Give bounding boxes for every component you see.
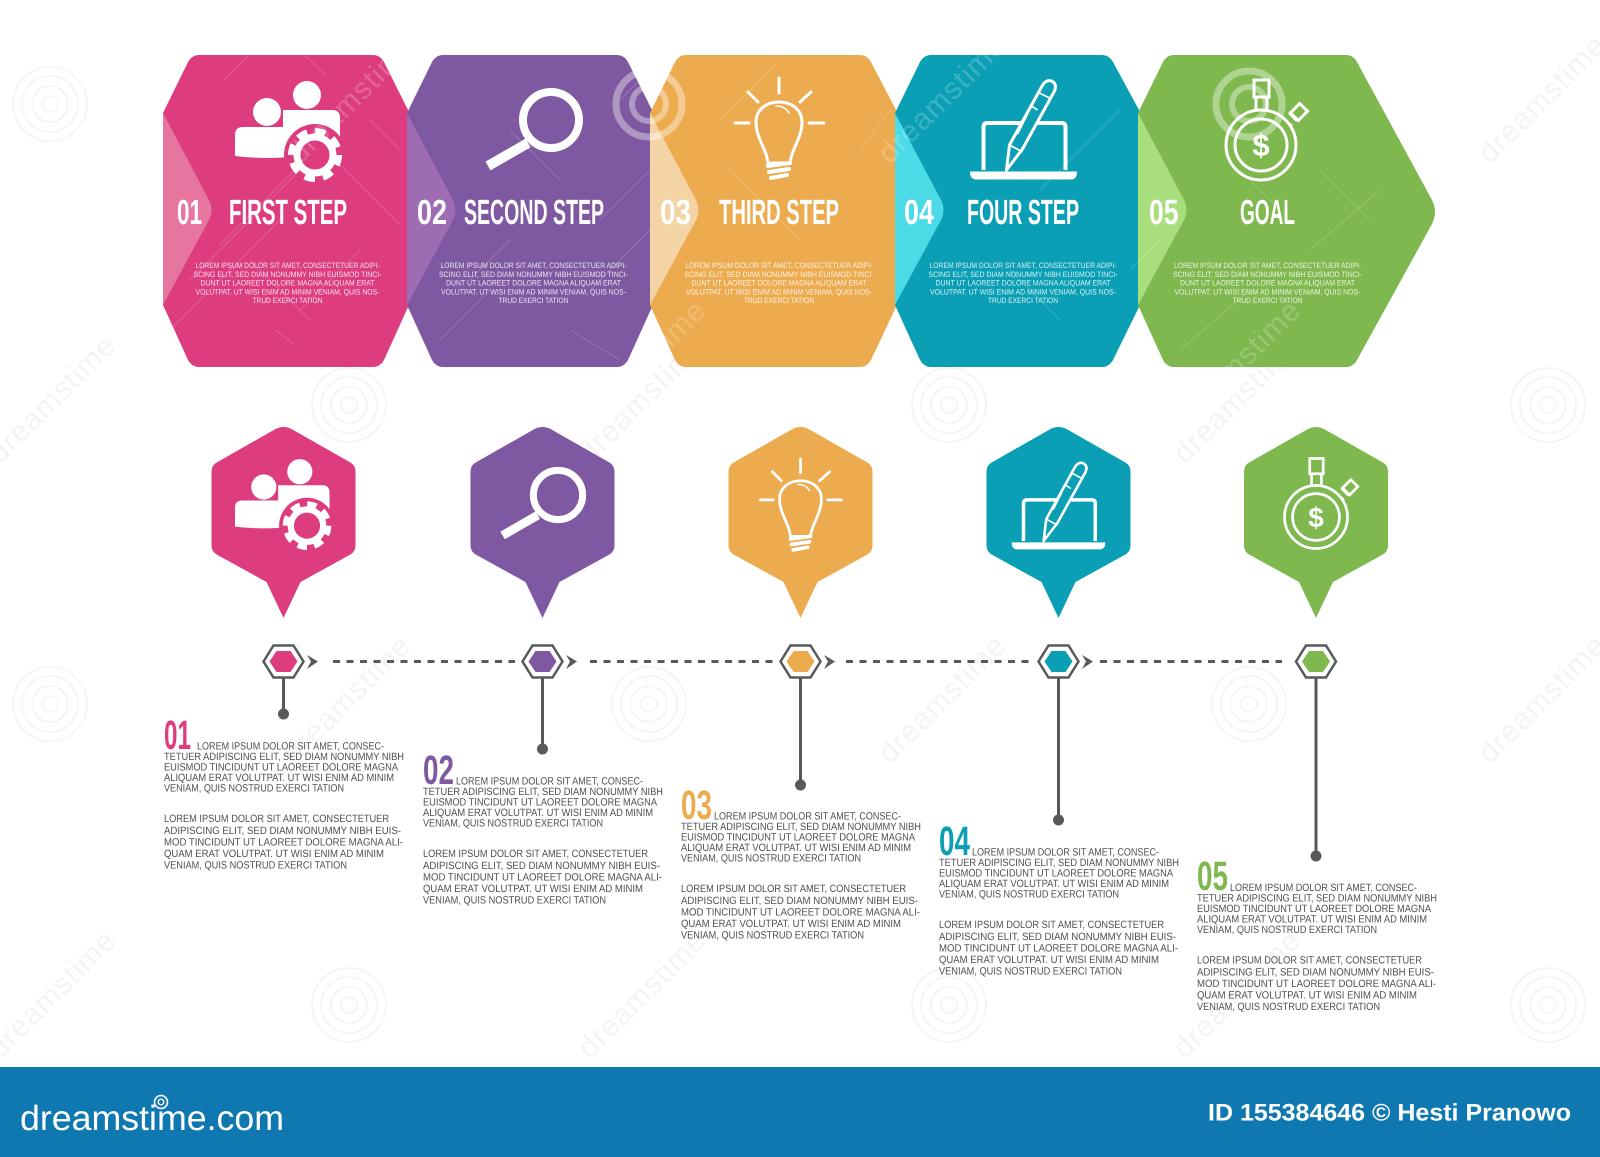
panel: four step: LOREM IPSUM DOLOR SIT AMET, CONSECTETUER ADIPI- <box>930 261 1117 270</box>
text block 02: ADIPISCING ELIT, SED DIAM NONUMMY NIBH EUIS- <box>423 860 660 872</box>
panel: four step <box>895 55 1139 367</box>
text block 04: LOREM IPSUM DOLOR SIT AMET, CONSECTETUER <box>939 919 1164 931</box>
text block 05: LOREM IPSUM DOLOR SIT AMET, CONSEC- <box>1230 882 1417 894</box>
text block 01: EUISMOD TINCIDUNT UT LAOREET DOLORE MAGNA <box>164 762 399 774</box>
panel: third step: LOREM IPSUM DOLOR SIT AMET, CONSECTETUER ADIPI- <box>686 261 873 270</box>
text block 04: VENIAM, QUIS NOSTRUD EXERCI TATION <box>939 888 1119 900</box>
panel: goal: 05 <box>1149 193 1178 232</box>
panel: goal: TRUD EXERCI TATION <box>1232 296 1302 305</box>
panel: four step: VOLUTPAT. UT WISI ENIM AD MINIM VENIAM, QUIS NOS- <box>930 288 1116 296</box>
text block 03: ALIQUAM ERAT VOLUTPAT. UT WISI ENIM AD MINIM <box>681 842 911 854</box>
watermark pattern: dreamstime <box>572 924 713 1065</box>
panel: third step: TRUD EXERCI TATION <box>744 296 814 305</box>
text block 03: QUAM ERAT VOLUTPAT. UT WISI ENIM AD MINIM <box>681 918 901 930</box>
panel: first step <box>163 55 408 367</box>
panel: four step: 04 <box>904 193 934 232</box>
text block 05: QUAM ERAT VOLUTPAT. UT WISI ENIM AD MINIM <box>1197 990 1417 1002</box>
panel: first step: DUNT UT LAOREET DOLORE MAGNA ALIQUAM ERAT <box>200 278 375 288</box>
text block 02: VENIAM, QUIS NOSTRUD EXERCI TATION <box>423 818 603 830</box>
text block 02: VENIAM, QUIS NOSTRUD EXERCI TATION <box>423 894 606 906</box>
text block 02: ALIQUAM ERAT VOLUTPAT. UT WISI ENIM AD MINIM <box>423 807 653 819</box>
text block 01: QUAM ERAT VOLUTPAT. UT WISI ENIM AD MINIM <box>164 848 384 860</box>
panel: first step: TRUD EXERCI TATION <box>252 296 322 305</box>
text block 05: EUISMOD TINCIDUNT UT LAOREET DOLORE MAGNA <box>1197 903 1432 915</box>
text block 05: VENIAM, QUIS NOSTRUD EXERCI TATION <box>1197 1001 1380 1013</box>
text block 05: MOD TINCIDUNT UT LAOREET DOLORE MAGNA ALI- <box>1197 978 1436 990</box>
text block 05 <box>1197 853 1437 1013</box>
text block 01: 01 <box>164 712 191 758</box>
text block 02: LOREM IPSUM DOLOR SIT AMET, CONSEC- <box>456 776 643 788</box>
pin: second step <box>470 427 614 618</box>
text block 02: MOD TINCIDUNT UT LAOREET DOLORE MAGNA ALI- <box>423 872 662 884</box>
watermark on panels: dreamstime <box>282 29 423 170</box>
text block 03 <box>681 782 921 942</box>
timeline <box>264 646 1336 862</box>
text block 02: QUAM ERAT VOLUTPAT. UT WISI ENIM AD MINIM <box>423 883 643 895</box>
panel: second step: SCING ELIT, SED DIAM NONUMMY NIBH EUISMOD TINCI- <box>439 270 628 279</box>
text block 04: EUISMOD TINCIDUNT UT LAOREET DOLORE MAGNA <box>939 868 1174 880</box>
text block 05: VENIAM, QUIS NOSTRUD EXERCI TATION <box>1197 924 1377 936</box>
text block 05: ADIPISCING ELIT, SED DIAM NONUMMY NIBH EUIS- <box>1197 966 1434 978</box>
panel: second step: LOREM IPSUM DOLOR SIT AMET, CONSECTETUER ADIPI- <box>440 261 627 270</box>
panel: four step: DUNT UT LAOREET DOLORE MAGNA ALIQUAM ERAT <box>936 278 1111 288</box>
watermark on panels: dreamstime <box>1167 294 1308 435</box>
panel: goal: DUNT UT LAOREET DOLORE MAGNA ALIQUAM ERAT <box>1180 278 1355 288</box>
text block 01: TETUER ADIPISCING ELIT, SED DIAM NONUMMY NIBH <box>164 751 404 763</box>
watermark on panels <box>170 29 1380 435</box>
panel: second step: SECOND STEP <box>464 193 604 232</box>
text block 01: ALIQUAM ERAT VOLUTPAT. UT WISI ENIM AD MINIM <box>164 772 394 784</box>
panel: four step: SCING ELIT, SED DIAM NONUMMY NIBH EUISMOD TINCI- <box>928 270 1118 279</box>
watermark on panels: dreamstime <box>872 29 1013 170</box>
text block 01: MOD TINCIDUNT UT LAOREET DOLORE MAGNA ALI- <box>164 836 403 848</box>
panel: four step: TRUD EXERCI TATION <box>988 296 1058 305</box>
text block 03: EUISMOD TINCIDUNT UT LAOREET DOLORE MAGNA <box>681 832 916 844</box>
text block 03: LOREM IPSUM DOLOR SIT AMET, CONSECTETUER <box>681 883 906 895</box>
text block 01: LOREM IPSUM DOLOR SIT AMET, CONSECTETUER <box>164 813 389 825</box>
text block 04 <box>939 818 1179 978</box>
text block 02: 02 <box>423 747 454 793</box>
pin: first step <box>212 427 356 618</box>
panel: second step: VOLUTPAT. UT WISI ENIM AD MINIM VENIAM, QUIS NOS- <box>441 288 626 296</box>
text block 01: VENIAM, QUIS NOSTRUD EXERCI TATION <box>164 860 347 872</box>
text block 05: TETUER ADIPISCING ELIT, SED DIAM NONUMMY NIBH <box>1197 892 1437 904</box>
panel: four step: FOUR STEP <box>967 193 1079 232</box>
text block 02: TETUER ADIPISCING ELIT, SED DIAM NONUMMY NIBH <box>423 786 663 798</box>
text block 04: TETUER ADIPISCING ELIT, SED DIAM NONUMMY NIBH <box>939 857 1179 869</box>
panel: goal <box>1138 55 1435 367</box>
text block 04: ADIPISCING ELIT, SED DIAM NONUMMY NIBH EUIS- <box>939 931 1176 943</box>
panel: second step <box>407 55 652 367</box>
footer bar: ID 155384646 © Hesti Pranowo <box>1208 1100 1571 1126</box>
panel: second step: DUNT UT LAOREET DOLORE MAGNA ALIQUAM ERAT <box>446 278 621 288</box>
text block 01 <box>164 712 404 872</box>
panel: second step: TRUD EXERCI TATION <box>498 296 568 305</box>
panel: third step: 03 <box>660 193 691 232</box>
text block 03: ADIPISCING ELIT, SED DIAM NONUMMY NIBH EUIS- <box>681 895 918 907</box>
text block 04: QUAM ERAT VOLUTPAT. UT WISI ENIM AD MINIM <box>939 954 1159 966</box>
panel: first step: SCING ELIT, SED DIAM NONUMMY NIBH EUISMOD TINCI- <box>194 270 382 279</box>
text block 03: 03 <box>681 782 712 828</box>
text block 03: TETUER ADIPISCING ELIT, SED DIAM NONUMMY NIBH <box>681 821 921 833</box>
text block 02: EUISMOD TINCIDUNT UT LAOREET DOLORE MAGNA <box>423 796 658 808</box>
watermark on panels: dreamstime <box>572 294 713 435</box>
panel: first step: VOLUTPAT. UT WISI ENIM AD MINIM VENIAM, QUIS NOS- <box>196 288 380 296</box>
text block 02 <box>423 747 663 906</box>
pin: goal <box>1244 427 1388 618</box>
panel: goal: VOLUTPAT. UT WISI ENIM AD MINIM VENIAM, QUIS NOS- <box>1174 288 1361 296</box>
panel: third step <box>650 55 896 367</box>
text block 04: ALIQUAM ERAT VOLUTPAT. UT WISI ENIM AD MINIM <box>939 878 1169 890</box>
text block 03: VENIAM, QUIS NOSTRUD EXERCI TATION <box>681 930 864 942</box>
text block 03: VENIAM, QUIS NOSTRUD EXERCI TATION <box>681 852 861 864</box>
text block 04: MOD TINCIDUNT UT LAOREET DOLORE MAGNA ALI- <box>939 942 1178 954</box>
text block 01: LOREM IPSUM DOLOR SIT AMET, CONSEC- <box>197 740 384 752</box>
panel: first step: 01 <box>177 193 202 232</box>
text block 01: ADIPISCING ELIT, SED DIAM NONUMMY NIBH EUIS- <box>164 825 401 837</box>
text block 04: LOREM IPSUM DOLOR SIT AMET, CONSEC- <box>972 846 1159 858</box>
text block 04: 04 <box>939 818 970 864</box>
watermark pattern: dreamstime <box>1167 329 1308 470</box>
panel: third step: THIRD STEP <box>719 193 839 232</box>
panel: third step: SCING ELIT, SED DIAM NONUMMY NIBH EUISMOD TINCI- <box>684 270 874 279</box>
panel: goal: LOREM IPSUM DOLOR SIT AMET, CONSECTETUER ADIPI- <box>1174 261 1361 270</box>
text block 05: LOREM IPSUM DOLOR SIT AMET, CONSECTETUER <box>1197 954 1422 966</box>
pin: four step <box>986 427 1130 618</box>
watermark pattern: dreamstime <box>1167 924 1308 1065</box>
watermark pattern: dreamstime <box>872 629 1013 770</box>
text block 05: 05 <box>1197 853 1228 899</box>
panel: third step: DUNT UT LAOREET DOLORE MAGNA ALIQUAM ERAT <box>692 278 867 288</box>
text block 01: VENIAM, QUIS NOSTRUD EXERCI TATION <box>164 782 344 794</box>
pin: third step <box>728 427 872 618</box>
text block 03: LOREM IPSUM DOLOR SIT AMET, CONSEC- <box>714 810 901 822</box>
panel: second step: 02 <box>417 193 447 232</box>
panel: first step: LOREM IPSUM DOLOR SIT AMET, CONSECTETUER ADIPI- <box>196 261 380 270</box>
footer bar <box>0 1067 1600 1157</box>
text block 04: VENIAM, QUIS NOSTRUD EXERCI TATION <box>939 966 1122 978</box>
footer bar: dreamstime.com <box>20 1099 284 1138</box>
panel: first step: FIRST STEP <box>229 193 347 232</box>
panel: goal: GOAL <box>1240 193 1295 232</box>
text block 02: LOREM IPSUM DOLOR SIT AMET, CONSECTETUER <box>423 848 648 860</box>
watermark pattern: dreamstime <box>277 629 418 770</box>
panel: goal: SCING ELIT, SED DIAM NONUMMY NIBH EUISMOD TINCI- <box>1173 270 1362 279</box>
watermark pattern: dreamstime <box>572 329 713 470</box>
text block 05: ALIQUAM ERAT VOLUTPAT. UT WISI ENIM AD MINIM <box>1197 914 1427 926</box>
panel: third step: VOLUTPAT. UT WISI ENIM AD MINIM VENIAM, QUIS NOS- <box>686 288 872 296</box>
text block 03: MOD TINCIDUNT UT LAOREET DOLORE MAGNA ALI- <box>681 906 920 918</box>
